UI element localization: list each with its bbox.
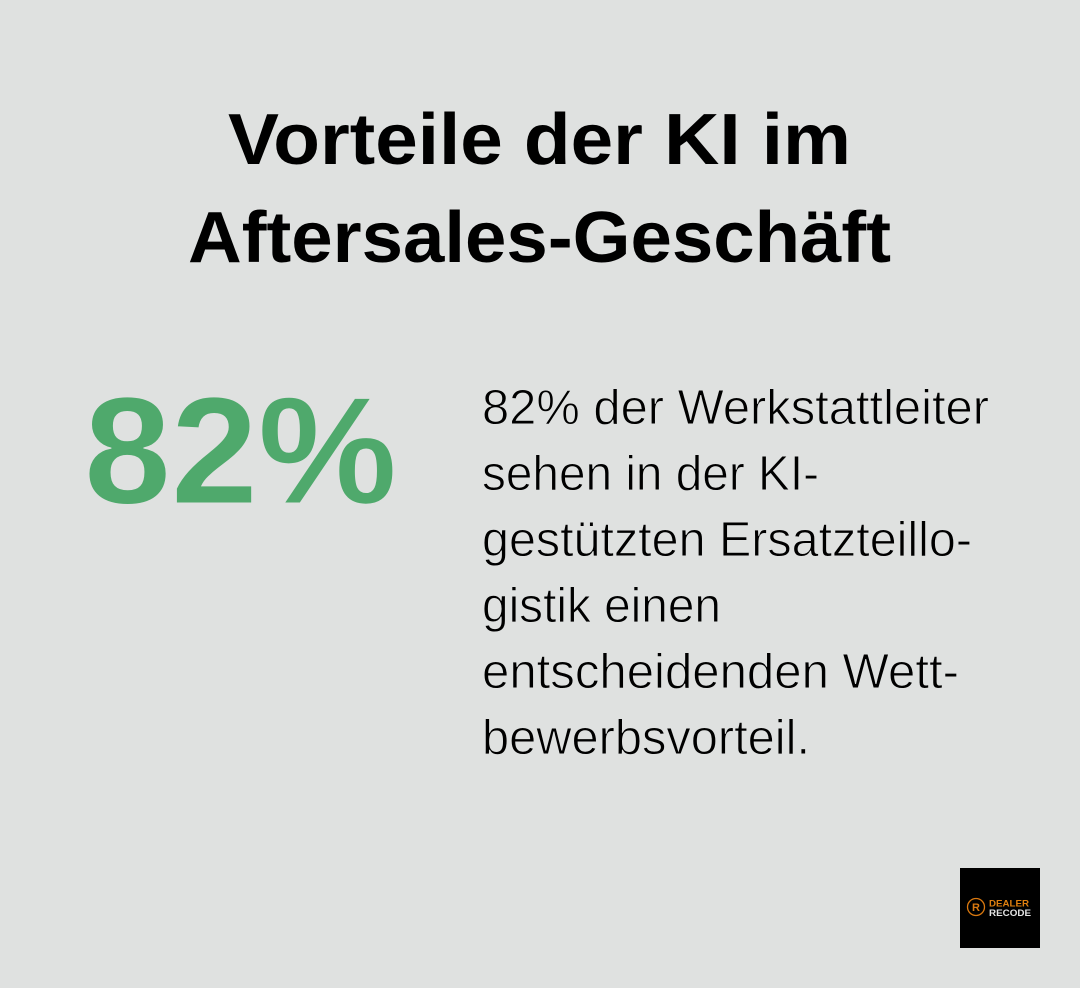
statistic: 82%: 82% — [84, 366, 397, 536]
description text: gistik einen — [482, 579, 721, 633]
logo wordmark — [989, 898, 1031, 919]
title — [188, 100, 891, 278]
title: Vorteile der KI im — [228, 100, 851, 180]
description text — [482, 381, 989, 765]
title: Aftersales-Geschäft — [188, 198, 891, 278]
description text: 82% der Werkstattleiter — [482, 381, 989, 435]
logo wordmark: RECODE — [989, 908, 1031, 919]
logo wordmark: DEALER — [989, 898, 1029, 910]
icon: R in circle: R — [972, 902, 980, 914]
description text: gestützten Ersatzteillo- — [482, 513, 972, 567]
logo: Dealer Recode — [960, 868, 1040, 948]
description text: bewerbsvorteil. — [482, 711, 810, 765]
description text: entscheidenden Wett- — [482, 645, 959, 699]
description text: sehen in der KI- — [482, 447, 819, 501]
